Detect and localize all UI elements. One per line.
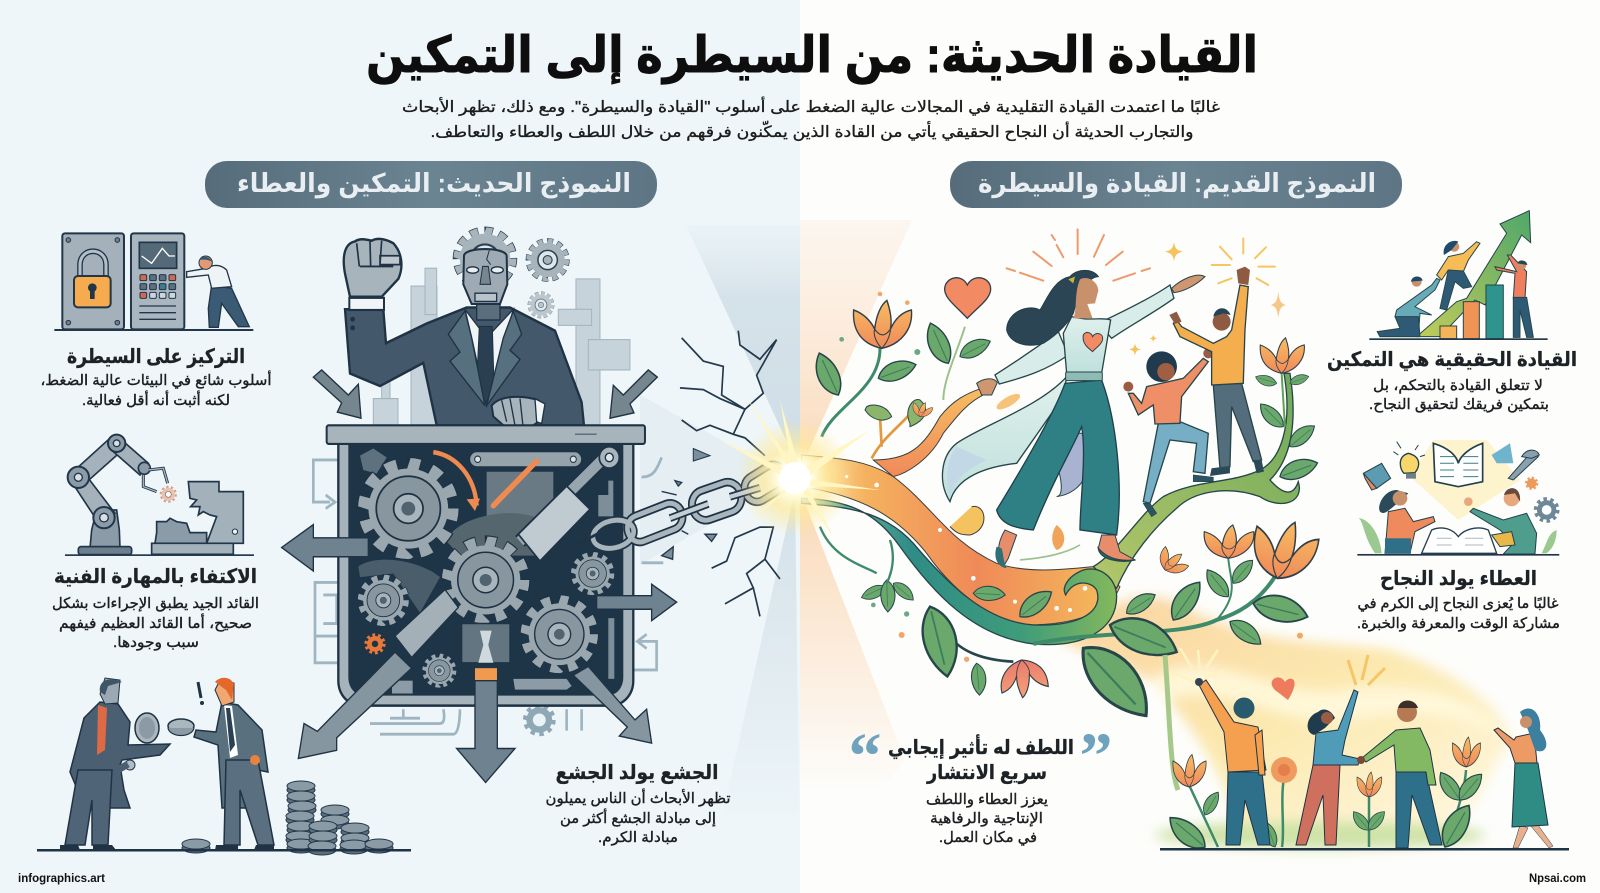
watermark: infographics.art: infographics.art (18, 873, 105, 885)
intro text: والتجارب الحديثة أن النجاح الحقيقي يأتي من القادة الذين يمكّنون فرقهم من خلال اللطف والعطاء والتعاطف. (430, 121, 1194, 142)
text: greed breeds greed: إلى مبادلة الجشع أكثر من (560, 808, 716, 827)
yellow stream of kindness behind the team (1060, 597, 1512, 849)
vine streams (802, 455, 1120, 625)
section pill: modern model (205, 161, 657, 208)
background: left half (0, 0, 800, 893)
upper left sprigs (822, 348, 880, 437)
resting hand (492, 397, 542, 431)
quote: kindness spreads (848, 720, 1112, 846)
text: true leadership is empowerment (1327, 349, 1577, 413)
quote: kindness spreads: الإنتاجية والرفاهية (930, 811, 1043, 827)
machine housing (338, 443, 633, 706)
text: technical skill: صحيح، أما القائد العظيم فيفهم (59, 613, 252, 632)
text: giving breeds success (1357, 568, 1560, 632)
outward arrows (282, 525, 368, 571)
background pipes (373, 268, 630, 425)
central illustration: command and control leader over machine (282, 231, 677, 782)
watermark: Npsai.com: Npsai.com (1529, 873, 1586, 885)
illustration: joyful team (1160, 648, 1569, 856)
light side schematics (313, 457, 663, 734)
quote: kindness spreads: سريع الانتشار (926, 762, 1047, 784)
text: giving breeds success: مشاركة الوقت والمعرفة والخبرة. (1357, 616, 1560, 632)
text: technical skill: سبب وجودها. (113, 635, 199, 651)
text: greed breeds greed: الجشع يولد الجشع (556, 762, 718, 784)
title: القيادة الحديثة: من السيطرة إلى التمكين (366, 27, 1258, 85)
person 1 (1195, 678, 1270, 845)
central burst of light (720, 395, 880, 540)
text: focus on control: لكنه أثبت أنه أقل فعالية. (82, 390, 230, 409)
text: greed breeds greed (546, 762, 730, 846)
icon: knowledge sharing around open book (1357, 440, 1559, 556)
light rays: left (640, 225, 800, 893)
text: giving breeds success: غالبًا ما يُعزى النجاح إلى الكرم في (1358, 596, 1559, 612)
text: greed breeds greed: مبادلة الكرم. (598, 830, 678, 846)
icon: robot arm and broken machine (65, 435, 254, 556)
intro text: غالبًا ما اعتمدت القيادة التقليدية في المجالات عالية الضغط على أسلوب "القيادة والسيطرة". ومع ذلك، تظهر الأبحاث (402, 96, 1220, 117)
machine interior gears (469, 451, 582, 467)
text: true leadership is empowerment: بتمكين فريقك لتحقيق النجاح. (1369, 397, 1549, 413)
text: focus on control: التركيز على السيطرة (67, 346, 245, 368)
background: right half (800, 0, 1600, 893)
quotation mark: left: “ (848, 720, 882, 793)
light rays: right (800, 220, 912, 893)
intro text (402, 96, 1220, 142)
text: technical skill: الاكتفاء بالمهارة الفنية (54, 566, 257, 588)
text: focus on control: أسلوب شائع في البيئات عالية الضغط، (40, 370, 272, 389)
text: focus on control (40, 346, 272, 409)
raising man (1169, 267, 1264, 476)
text: technical skill (52, 566, 259, 651)
quote: kindness spreads: في مكان العمل. (939, 830, 1037, 846)
right illustration: servant leader on growing vine (802, 229, 1321, 728)
chain breaking (547, 460, 790, 561)
quote: kindness spreads: اللطف له تأثير إيجابي (888, 733, 1074, 760)
pressure arrows (313, 370, 361, 418)
woman leader (942, 270, 1205, 568)
icon: two businessmen exchanging and coin stacks (37, 678, 411, 855)
raised fist (349, 298, 384, 310)
dots (839, 292, 1303, 662)
rays (1007, 229, 1150, 281)
icon: lock and control panel with pushing man (54, 233, 253, 331)
person 4 (1494, 708, 1553, 848)
vine decoration (820, 338, 1321, 728)
person 3 (1357, 700, 1442, 848)
text: true leadership is empowerment: القيادة الحقيقية هي التمكين (1327, 349, 1577, 372)
person 2 (1296, 690, 1360, 845)
heart (945, 278, 991, 318)
cracks in the wall (662, 331, 780, 616)
text: technical skill: القائد الجيد يطبق الإجراءات بشكل (52, 596, 259, 612)
section pill: modern model: النموذج الحديث: التمكين والعطاء (237, 168, 631, 199)
quote: kindness spreads: يعزز العطاء واللطف (926, 792, 1048, 808)
text: true leadership is empowerment: لا تتعلق القيادة بالتحكم، بل (1373, 378, 1543, 394)
text: giving breeds success: العطاء يولد النجاح (1380, 568, 1537, 590)
climbing child (1123, 348, 1213, 517)
plants (1190, 770, 1466, 847)
section pill: old model: النموذج القديم: القيادة والسيطرة (978, 168, 1376, 199)
suit (345, 307, 584, 425)
robot head (477, 295, 500, 320)
section pill: old model (950, 161, 1402, 208)
text: greed breeds greed: تظهر الأبحاث أن الناس يميلون (546, 788, 730, 807)
quotation mark: right: ” (1080, 720, 1112, 793)
icon: team climbing growth arrow (1369, 211, 1548, 340)
